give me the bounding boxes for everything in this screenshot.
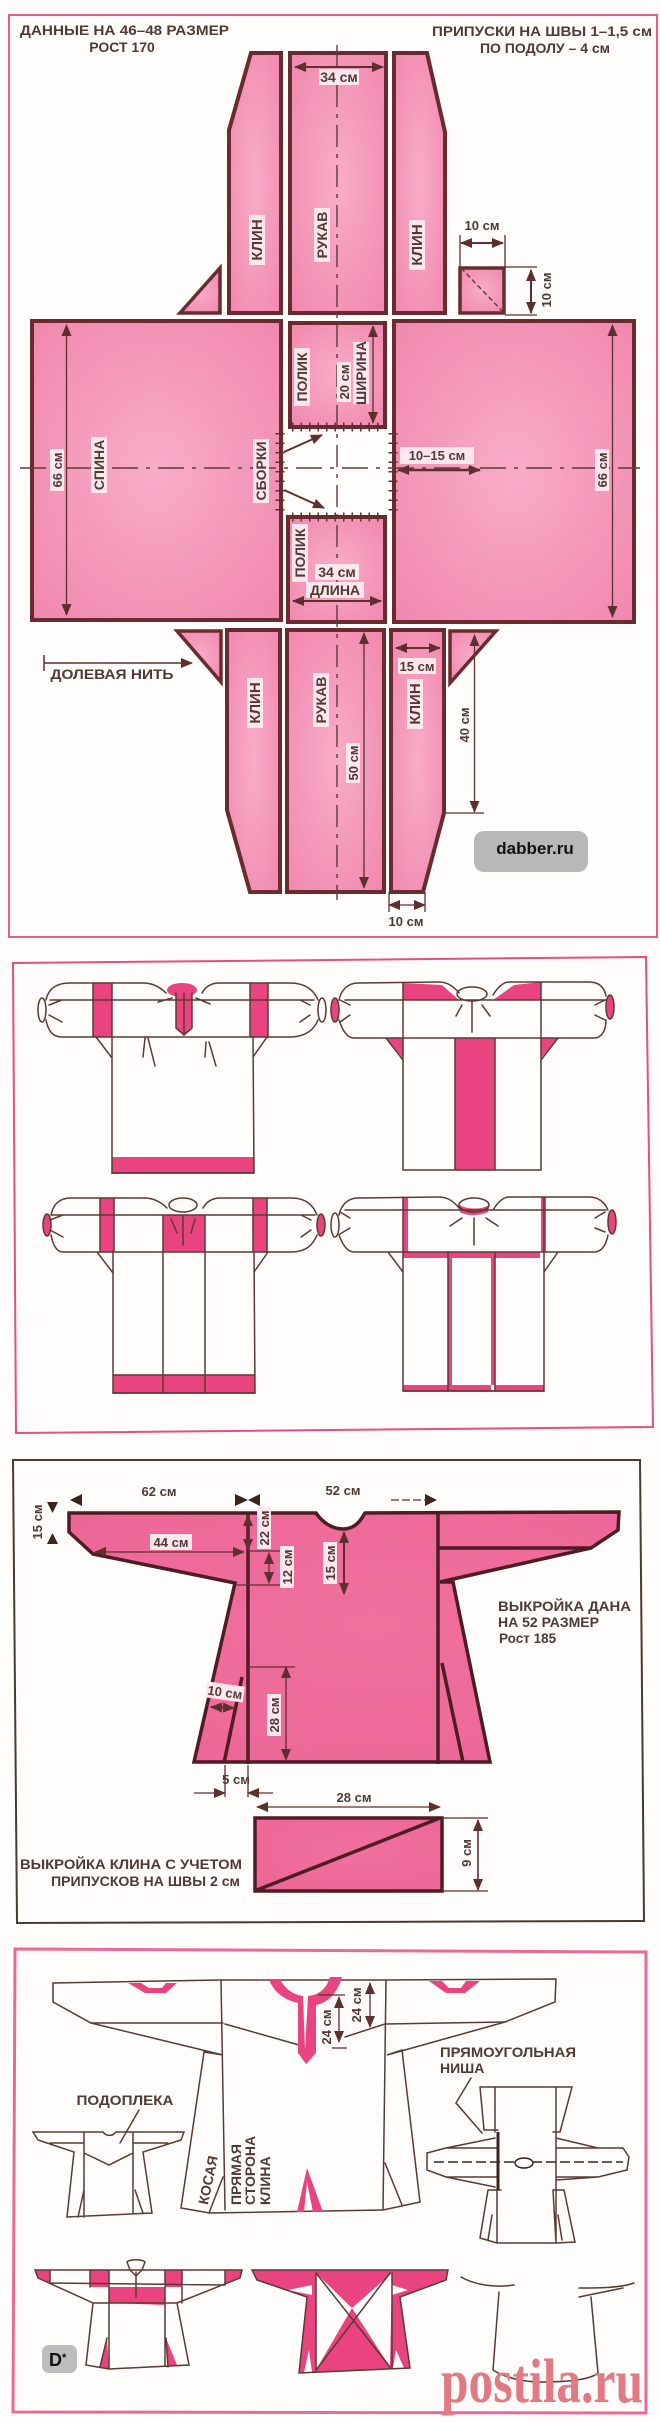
pattern dimension labels: 22 см [257, 1511, 272, 1545]
shirt pattern shape [69, 1512, 619, 1762]
main shirt [53, 1977, 556, 2213]
labels: horizontal dimensions: 10 см [465, 218, 499, 233]
piece: upper left gusset [229, 53, 281, 313]
piece: top yoke [290, 323, 385, 427]
badge: D* [42, 2345, 77, 2373]
pattern dimension labels: 28 см [267, 1698, 282, 1732]
badge: D*: * [62, 2352, 67, 2364]
panel: full cutting layout [9, 15, 657, 937]
labels: horizontal dimensions: 34 см [318, 564, 356, 580]
piece: bottom yoke [288, 517, 385, 622]
labels: horizontal dimensions: ДЛИНА [310, 582, 360, 598]
pattern dimension labels: 12 см [280, 1550, 295, 1584]
main shirt labels [195, 2136, 273, 2206]
shirt variant 4 [331, 1197, 616, 1391]
panel: shirt construction variants [13, 1949, 646, 2416]
small shirt: rectangular niche: НИША [440, 2060, 484, 2076]
labels: horizontal dimensions: 34 см [320, 69, 358, 85]
gathering ticks [280, 427, 393, 517]
heading: seam allowances: ПРИПУСКИ НА ШВЫ 1–1,5 см [432, 23, 652, 39]
panel: four shirt variants [13, 957, 653, 1433]
pattern dimension labels: 15 см [30, 1505, 45, 1539]
heading: size data: РОСТ 170 [89, 39, 155, 55]
pattern dimension labels: 10 см [207, 1683, 243, 1702]
piece: upper right gusset [394, 53, 445, 313]
labels: rotated piece names: 66 см [595, 453, 610, 487]
small shirt: colored panels [35, 2260, 242, 2369]
piece: lower left gusset [227, 630, 280, 892]
main shirt labels: КОСАЯ [195, 2154, 221, 2206]
labels: rotated piece names: ПОЛИК [292, 528, 308, 578]
labels: rotated piece names: 50 см [346, 746, 361, 780]
pattern seams [224, 1512, 590, 1764]
labels: rotated piece names: 20 см [337, 365, 352, 399]
labels: rotated piece names: ШИРИНА [353, 341, 369, 405]
piece: lower right gusset [391, 630, 444, 892]
gusset pattern rectangle [255, 1818, 442, 1891]
main shirt labels: КЛИНА [257, 2156, 273, 2205]
badge: dabber.ru [474, 831, 588, 872]
arrows: dimensions [44, 67, 612, 912]
labels: rotated piece names: КЛИН [247, 682, 264, 724]
piece: front [394, 321, 634, 622]
shirt variant 1 [38, 983, 326, 1173]
labels: rotated piece names: РУКАВ [314, 212, 330, 258]
piece: lower right triangle [450, 631, 496, 683]
labels: rotated piece names: РУКАВ [313, 677, 329, 723]
shirt variant 2 [331, 982, 614, 1170]
note: size 52: НА 52 РАЗМЕР [498, 1614, 599, 1630]
labels: rotated piece names: СБОРКИ [253, 441, 269, 501]
labels: rotated piece names: 10 см [539, 273, 554, 307]
piece: small square [460, 268, 504, 313]
heading: seam allowances: ПО ПОДОЛУ – 4 см [480, 40, 610, 56]
pattern dimension labels [30, 1483, 474, 1867]
labels: horizontal dimensions: ДОЛЕВАЯ НИТЬ [50, 666, 174, 682]
badge: D*: D [49, 2350, 62, 2370]
labels: horizontal dimensions: 10 см [389, 914, 423, 929]
pattern dimension labels: 15 см [323, 1546, 338, 1580]
piece: back [32, 321, 281, 620]
labels: rotated piece names: ПОЛИК [294, 352, 310, 402]
pattern dimension labels: 9 см [459, 1839, 474, 1867]
note: size 52 [498, 1597, 631, 1646]
small shirt: podopleka: ПОДОПЛЕКА [76, 2092, 174, 2108]
piece: small triangle [180, 268, 220, 313]
small shirt: partial outline [461, 2277, 634, 2382]
note: size 52: Рост 185 [499, 1631, 557, 1646]
piece: lower sleeve [287, 630, 384, 892]
small shirt: podopleka [33, 2092, 184, 2217]
badge: dabber.ru: dabber.ru [496, 839, 574, 858]
small shirt: rectangular niche: ПРЯМОУГОЛЬНАЯ [440, 2044, 576, 2060]
note: gusset pattern: ВЫКРОЙКА КЛИНА С УЧЕТОМ [20, 1855, 242, 1872]
labels: horizontal dimensions: 15 см [400, 659, 434, 674]
neck dimension labels: 24 см [319, 2010, 334, 2044]
labels: rotated piece names: КЛИН [409, 224, 426, 266]
labels: rotated piece names: КЛИН [249, 219, 266, 261]
pattern dimension labels: 62 см [142, 1484, 176, 1499]
panel: shirt pattern size 52 [13, 1460, 644, 1923]
labels: horizontal dimensions: 10–15 см [409, 448, 465, 463]
shirt variant 3 [43, 1198, 325, 1393]
labels: horizontal dimensions [50, 69, 499, 929]
neck dimension labels [319, 1988, 364, 2044]
heading: size data: ДАННЫЕ НА 46–48 РАЗМЕР [20, 22, 229, 38]
neck dimension labels: 24 см [349, 1988, 364, 2022]
neck dimension arrows [318, 1983, 370, 2048]
pattern dimension labels: 52 см [326, 1483, 360, 1498]
heading: seam allowances [432, 23, 652, 56]
dimension arrows [47, 1494, 488, 1891]
labels: rotated piece names: 40 см [457, 708, 472, 742]
pattern dimension labels: 44 см [154, 1535, 188, 1550]
note: gusset pattern [20, 1855, 242, 1889]
labels: rotated piece names: СПИНА [91, 440, 107, 490]
small shirt: rectangular niche [427, 2044, 629, 2243]
pink neckline and placket [269, 1977, 342, 2064]
main shirt labels: СТОРОНА [242, 2136, 258, 2205]
labels: rotated piece names [50, 208, 610, 783]
small shirt: X panels [252, 2270, 448, 2373]
main shirt labels: ПРЯМАЯ [228, 2144, 244, 2205]
note: size 52: ВЫКРОЙКА ДАНА [498, 1597, 631, 1614]
pink hem slit [297, 2168, 323, 2212]
pattern dimension labels: 5 см [222, 1772, 250, 1787]
piece: lower left triangle [177, 631, 221, 682]
piece: upper sleeve [290, 53, 386, 313]
center fold lines [20, 45, 640, 900]
heading: size data [20, 22, 229, 55]
pink sleeve accents [128, 1981, 480, 1993]
labels: rotated piece names: 66 см [50, 453, 65, 487]
pattern dimension labels: 28 см [337, 1790, 371, 1805]
note: gusset pattern: ПРИПУСКОВ НА ШВЫ 2 см [51, 1873, 240, 1889]
labels: rotated piece names: КЛИН [407, 683, 424, 725]
